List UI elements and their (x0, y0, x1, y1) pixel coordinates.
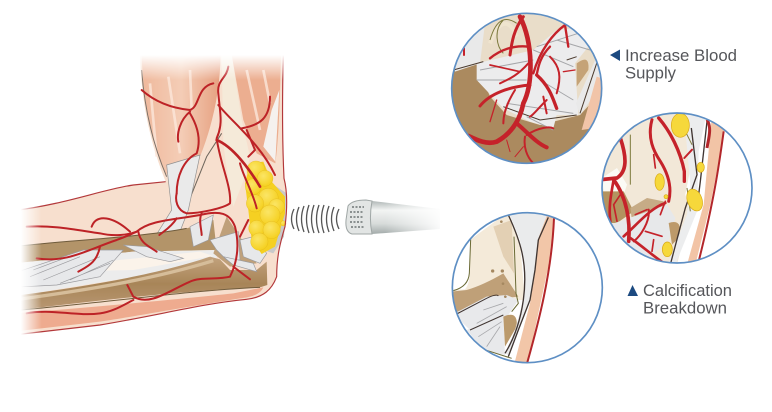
circle: increase blood supply detail (450, 12, 602, 164)
label: increase blood supply: Supply (625, 64, 677, 82)
forearm skin band (13, 287, 263, 332)
shockwave applicator (346, 195, 445, 240)
calcification deposit (245, 161, 286, 254)
forearm bones (13, 217, 267, 311)
label: increase blood supply (610, 47, 737, 82)
label: increase blood supply: Increase Blood (625, 47, 737, 65)
label: calcification breakdown (628, 282, 732, 318)
circle: healed elbow detail (452, 212, 604, 364)
forearm ligaments (13, 215, 267, 287)
skin silhouette (13, 53, 287, 335)
label: calcification breakdown: Breakdown (643, 300, 727, 318)
biceps tendon (150, 155, 200, 245)
shockwave pulses (292, 205, 339, 233)
circle: calcification detail (597, 108, 757, 268)
arrow: up pointer (628, 285, 638, 296)
fade masks (0, 177, 42, 343)
arrow: left pointer (610, 50, 620, 61)
arteries (27, 67, 275, 314)
label: calcification breakdown: Calcification (643, 282, 732, 300)
circle outline (452, 13, 602, 163)
skin outline (13, 53, 287, 335)
circle outline (602, 113, 752, 263)
illustration: elbow anatomy (0, 47, 290, 343)
upper arm muscles (142, 55, 281, 207)
circle outline (452, 213, 602, 363)
